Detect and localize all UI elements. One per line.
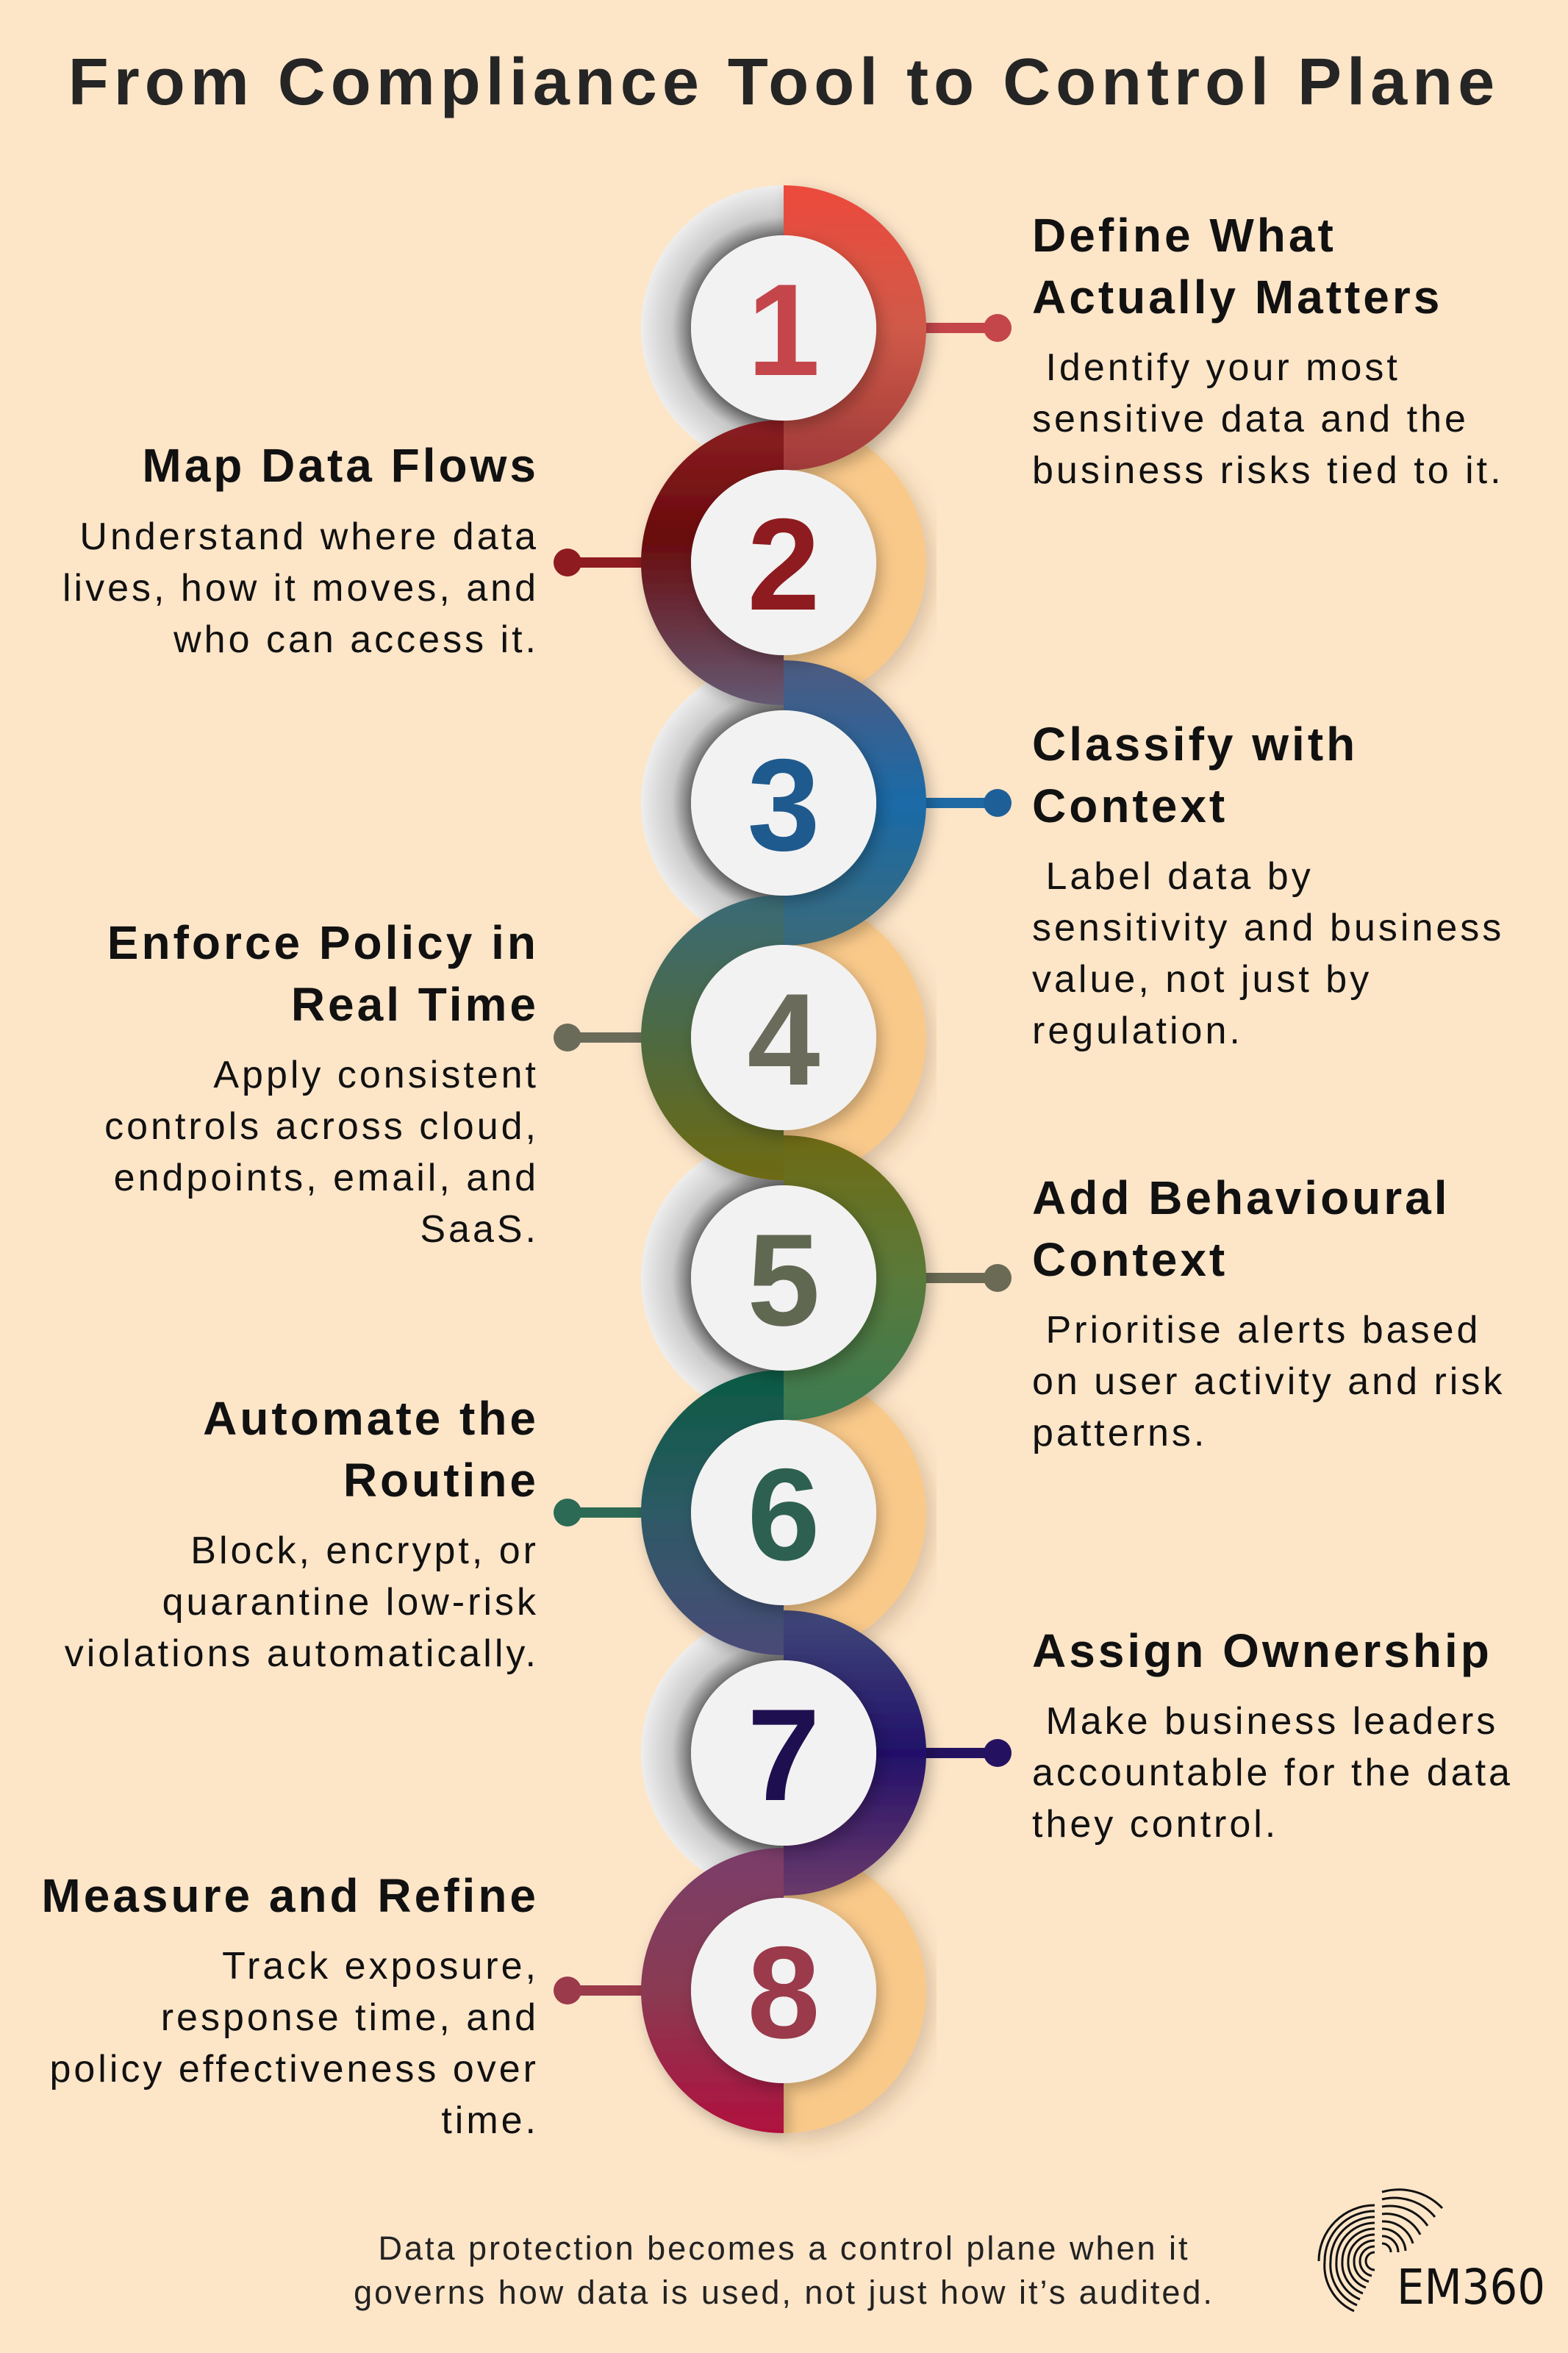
numbers: 7 [747,1682,820,1828]
step 4 text: Real Time [291,978,539,1031]
number circles [691,235,876,2083]
step 2 text [62,439,539,661]
step 1 text: Actually Matters [1032,271,1442,324]
numbers: 4 [747,966,820,1113]
step 5 text: Context [1032,1233,1228,1286]
step 6 text [65,1392,539,1675]
step 4 text [104,916,539,1251]
footer text: Data protection becomes a control plane when it [378,2229,1190,2267]
step 6 text: Automate the [203,1392,539,1445]
step 6 text: Block, encrypt, or quarantine low-risk violations automatically. [65,1529,539,1675]
step 3 text: Context [1032,779,1228,832]
numbers: 6 [747,1441,820,1588]
numbers: 8 [747,1919,820,2065]
step 3 text: Label data by sensitivity and business value, not just by regulation. [1032,855,1504,1052]
numbers: 5 [747,1207,820,1353]
step 3 text [1032,718,1504,1052]
numbers [747,257,820,2065]
step 4 text: Apply consistent controls across cloud, endpoints, email, and SaaS. [104,1054,539,1251]
step 1 text: Identify your most sensitive data and the business risks tied to it. [1032,346,1504,492]
step 5 text: Add Behavioural [1032,1171,1450,1224]
numbers: 2 [747,491,820,638]
step 6 text: Routine [343,1454,539,1507]
step 2 text: Understand where data lives, how it moves, and who can access it. [62,515,539,661]
numbers: 3 [747,732,820,878]
connectors [554,314,1012,2004]
step 1 text: Define What [1032,209,1336,262]
step 5 text: Prioritise alerts based on user activity and risk patterns. [1032,1309,1505,1454]
step 7 text [1032,1624,1513,1846]
step 2 text: Map Data Flows [142,439,539,492]
logo: EM360: EM360 [1397,2259,1545,2315]
step 5 text [1032,1171,1505,1454]
step 8 text: Track exposure, response time, and policy effectiveness over time. [49,1945,539,2142]
step 1 text [1032,209,1504,492]
step 7 text: Assign Ownership [1032,1624,1492,1677]
ring back halves [666,210,901,2108]
step 7 text: Make business leaders accountable for the data they control. [1032,1700,1513,1846]
step 4 text: Enforce Policy in [107,916,539,969]
footer text [354,2229,1214,2311]
logo: EM360 [1317,2188,1545,2315]
colored serpentine ribbon [666,210,901,2108]
step 3 text: Classify with [1032,718,1358,771]
footer text: governs how data is used, not just how it’s audited. [354,2274,1214,2311]
title: From Compliance Tool to Control Plane [68,46,1500,119]
step 8 text: Measure and Refine [41,1869,539,1922]
numbers: 1 [747,257,820,403]
